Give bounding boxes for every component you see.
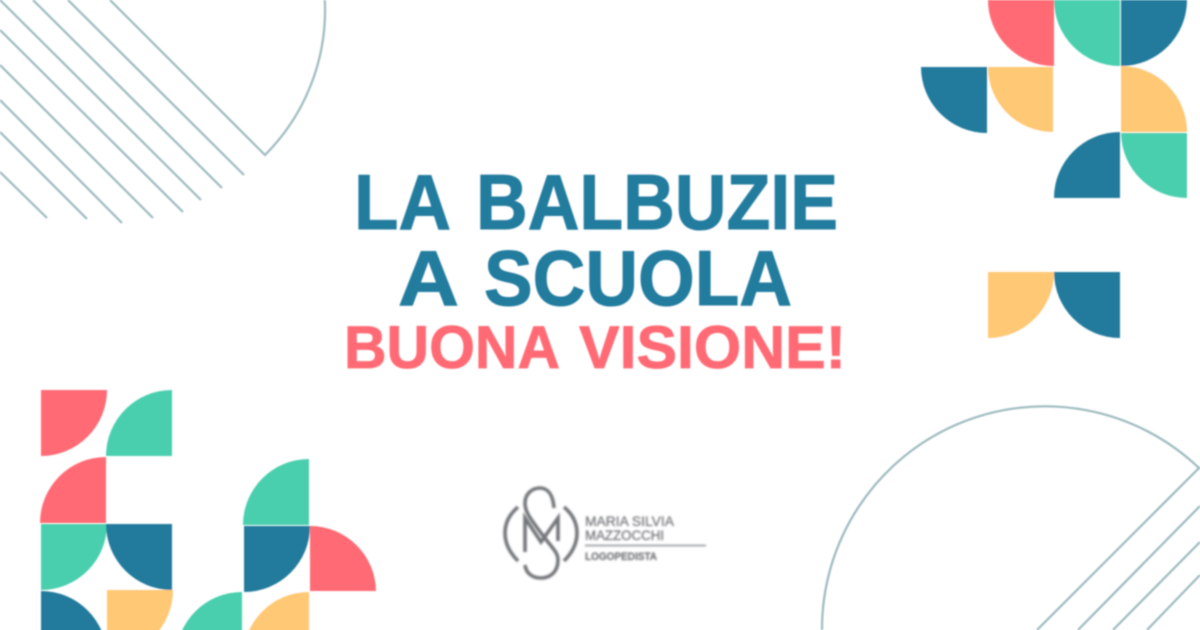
subtitle: buona visione: BUONA — [344, 314, 560, 381]
decoration: top-right quarter circle mosaic — [921, 0, 1187, 198]
decoration: bottom-right half circle with diagonal lines — [822, 406, 1200, 630]
logo name text: MAZZOCCHI — [585, 527, 664, 543]
title: la balbuzie a scuola: SCUOLA — [484, 234, 792, 322]
decoration: top-left half circle with diagonal lines — [0, 0, 325, 223]
title: la balbuzie a scuola: A — [398, 234, 459, 322]
logo name text: LOGOPEDISTA — [585, 551, 657, 563]
title: la balbuzie a scuola: BALBUZIE — [476, 158, 838, 246]
title: la balbuzie a scuola — [354, 158, 838, 322]
logo monogram: S and M in parentheses — [505, 488, 577, 578]
logo name text — [585, 513, 675, 563]
logo name text: MARIA SILVIA — [585, 513, 675, 529]
decoration: right-side yellow and blue quarter circles — [988, 272, 1120, 338]
subtitle: buona visione: VISIONE! — [579, 314, 846, 381]
logo: Maria Silvia Mazzocchi logopedista — [505, 488, 706, 578]
decoration: bottom-left quarter circle mosaic — [40, 390, 376, 630]
subtitle: buona visione — [344, 314, 846, 381]
title: la balbuzie a scuola: LA — [354, 158, 451, 246]
